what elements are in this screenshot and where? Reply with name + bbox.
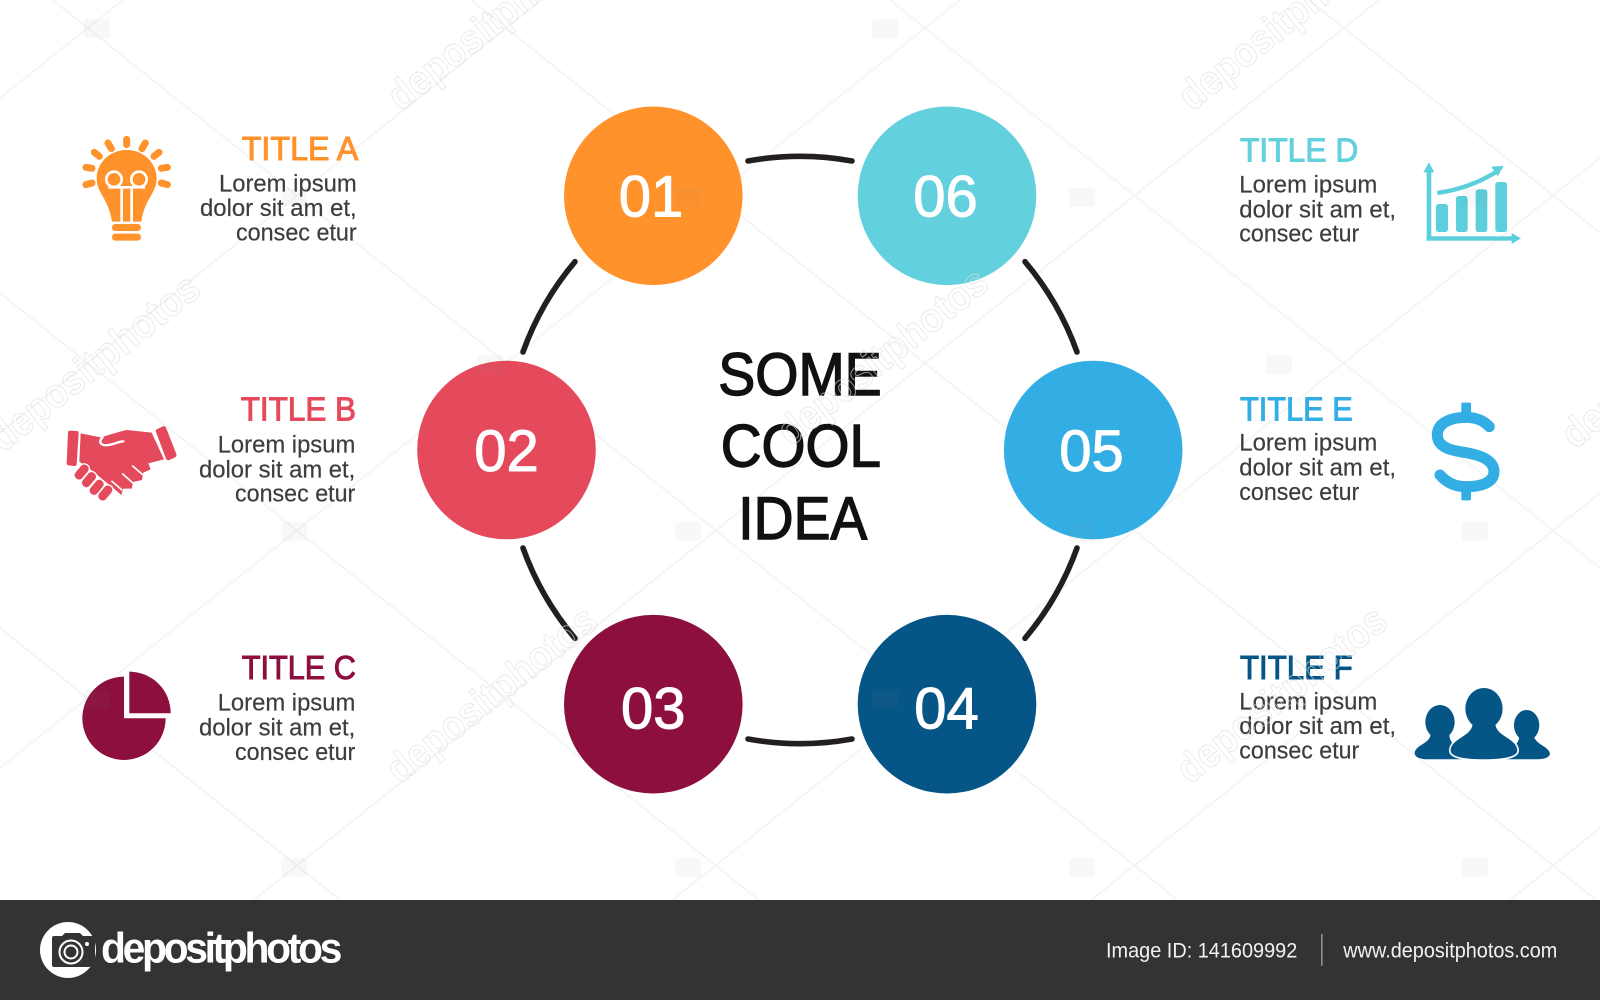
text block: title A: dolor sit am et, [200,195,357,222]
center heading: IDEA [738,485,867,552]
icon: light bulb [86,139,167,241]
text block: title A: Lorem ipsum [219,171,357,198]
icon: handshake [67,426,176,503]
text block: title C: dolor sit am et, [199,714,355,741]
text block: title C: consec etur [235,739,355,766]
text block: title A: TITLE A [242,130,358,167]
infographic canvas: depositphotos [768,258,997,454]
text block: title F: Lorem ipsum [1239,688,1377,715]
image id: Image ID: 141609992 [1106,939,1297,962]
step circle 06 [858,106,1036,285]
text block: title B: TITLE B [241,391,356,428]
step circle 04 [858,615,1036,794]
step circle 02: 02 [474,419,539,484]
text block: title E: dolor sit am et, [1239,454,1396,481]
text block: title D: TITLE D [1240,132,1358,169]
text block: title F: TITLE F [1240,649,1353,686]
step circle 02 [417,361,596,539]
icon: pie chart [82,672,171,760]
text block: title E: Lorem ipsum [1239,430,1377,457]
logo wordmark: depositphotos [101,924,342,972]
text block: title B [199,391,356,508]
step circle 03: 03 [621,676,686,742]
icon: camera logo [40,922,96,978]
text block: title D: Lorem ipsum [1239,172,1377,199]
text block: title D: dolor sit am et, [1239,196,1396,223]
footer bar [0,900,1600,1000]
text block: title D: consec etur [1239,221,1359,248]
text block: title D [1239,132,1396,248]
ring connector arcs [523,156,1077,744]
center heading: SOME [718,341,882,408]
website url: www.depositphotos.com [1342,939,1557,962]
step circle 01: 01 [619,164,683,230]
text block: title B: dolor sit am et, [199,456,355,483]
text block: title E [1239,391,1396,506]
text block: title F: consec etur [1239,737,1359,764]
step circle 01 [564,106,743,285]
text block: title B: Lorem ipsum [218,432,355,459]
center heading [718,341,882,552]
icon: growth bar chart [1423,162,1521,244]
text block: title A: consec etur [236,220,357,247]
text block: title E: consec etur [1239,479,1359,506]
infographic canvas: depositphotos [1167,596,1396,792]
text block: title E: TITLE E [1240,391,1353,428]
step circle 05: 05 [1059,419,1124,484]
text block: title A [200,130,358,247]
text block: title C: Lorem ipsum [218,690,355,717]
step circle 03 [564,615,743,794]
icon: dollar sign [1437,403,1494,500]
infographic canvas: depositphotos [377,596,606,792]
text block: title B: consec etur [235,481,355,508]
text block: title F: dolor sit am et, [1239,713,1396,740]
icon: group of people [1415,688,1550,759]
step circle 06: 06 [913,164,978,230]
text block: title F [1239,649,1396,764]
step circle 04: 04 [914,676,979,742]
text block: title C [199,649,356,766]
step circle 05 [1004,361,1182,539]
text block: title C: TITLE C [242,649,356,686]
center heading: COOL [721,413,881,480]
